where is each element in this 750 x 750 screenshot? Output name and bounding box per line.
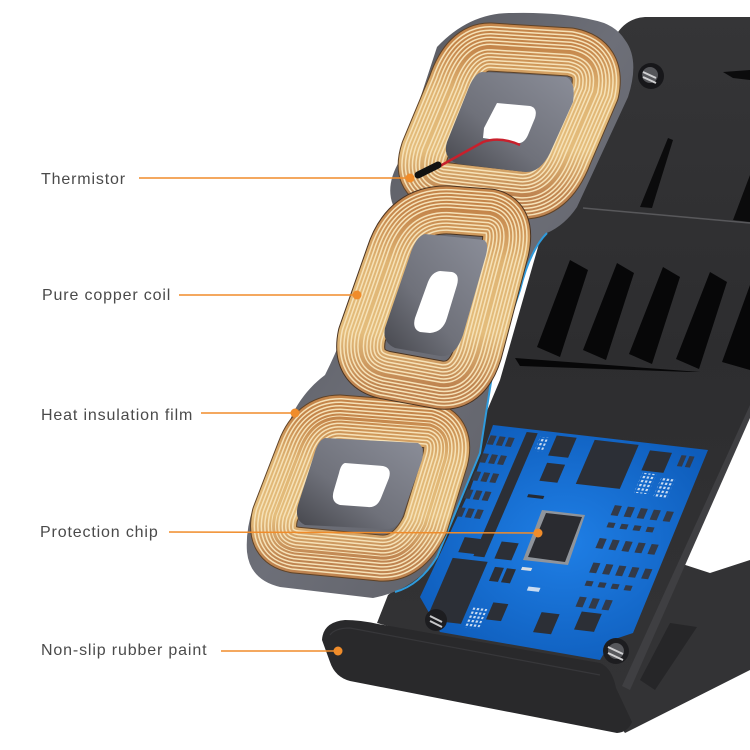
label: Pure copper coil xyxy=(42,287,362,304)
stand body back panel xyxy=(377,17,750,690)
screw: top xyxy=(638,63,664,89)
middle copper coil xyxy=(361,210,507,385)
bottom copper coil xyxy=(274,418,447,558)
lower slots xyxy=(515,260,750,372)
label: Pure copper coil: Pure copper coil xyxy=(42,287,171,304)
top copper coil xyxy=(422,47,596,195)
divider ledge xyxy=(583,208,750,223)
label: Thermistor: Thermistor xyxy=(41,171,126,188)
coil backing plate xyxy=(247,13,633,598)
upper ribs xyxy=(640,70,750,222)
bottom coil centre plate with opening xyxy=(297,438,423,529)
label: Thermistor xyxy=(41,171,414,188)
label: Non-slip rubber paint: Non-slip rubber paint xyxy=(41,642,207,659)
board components xyxy=(411,428,703,645)
circuit board xyxy=(411,425,708,664)
label: Heat insulation film: Heat insulation film xyxy=(41,407,193,424)
top coil centre plate with opening xyxy=(446,72,574,172)
front base with non-slip rubber paint xyxy=(322,620,632,733)
screw: left board xyxy=(425,609,447,631)
rear foot of stand xyxy=(600,560,750,733)
label: Heat insulation film xyxy=(41,407,300,424)
screw: right board xyxy=(603,638,629,664)
label: Non-slip rubber paint xyxy=(41,642,342,659)
label: Protection chip xyxy=(40,524,542,541)
middle coil centre plate with opening xyxy=(384,234,487,356)
protection chip xyxy=(523,510,585,565)
thermistor wire and bead xyxy=(418,140,520,175)
label: Protection chip: Protection chip xyxy=(40,524,159,541)
